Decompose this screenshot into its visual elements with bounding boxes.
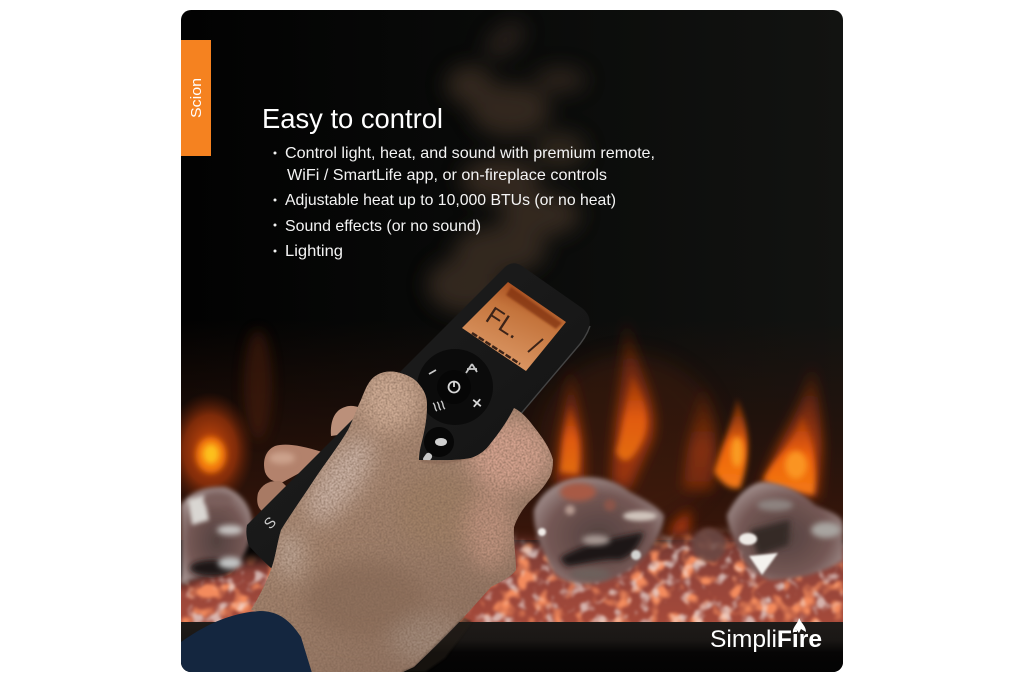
bullet: controls: WiFi / SmartLife app, or on-fireplace controls (287, 167, 607, 184)
blurred smoke (427, 14, 586, 313)
crystal: small (692, 528, 726, 562)
glass crystals (181, 477, 843, 585)
crystal: right (727, 482, 843, 580)
tab: Scion (181, 40, 211, 156)
remote lcd screen (462, 282, 566, 371)
sleeve cuff (181, 611, 312, 673)
bullet: controls: Control light, heat, and sound with premium remote, (285, 145, 655, 162)
glass ember bed (181, 520, 843, 625)
feature list (274, 145, 655, 260)
bullet: controls (274, 145, 655, 184)
tab: Scion: Scion (189, 78, 205, 118)
photo panel (166, 10, 843, 675)
bullet: sound: Sound effects (or no sound) (285, 218, 481, 235)
heading: Easy to control (262, 103, 443, 134)
remote lcd screen: FL. (481, 302, 526, 345)
remote control wheel (417, 349, 493, 425)
crystal: left (181, 487, 252, 585)
flames (166, 318, 821, 535)
fingers behind remote (257, 406, 362, 511)
bullet: lighting: Lighting (285, 243, 343, 260)
hand (240, 365, 560, 675)
infographic (181, 10, 843, 672)
arm hair (401, 617, 472, 672)
fireplace base band (181, 622, 843, 673)
icon: logo flame (793, 618, 806, 633)
crystal: centre (534, 477, 664, 584)
remote control (246, 263, 590, 568)
remote brand letter: S (261, 514, 280, 533)
bullet: heat: Adjustable heat up to 10,000 BTUs (or no heat) (285, 192, 616, 209)
remote lower buttons (423, 427, 454, 460)
background fire glow (181, 320, 843, 540)
logo: SimpliFire: SimpliFire (710, 626, 822, 653)
